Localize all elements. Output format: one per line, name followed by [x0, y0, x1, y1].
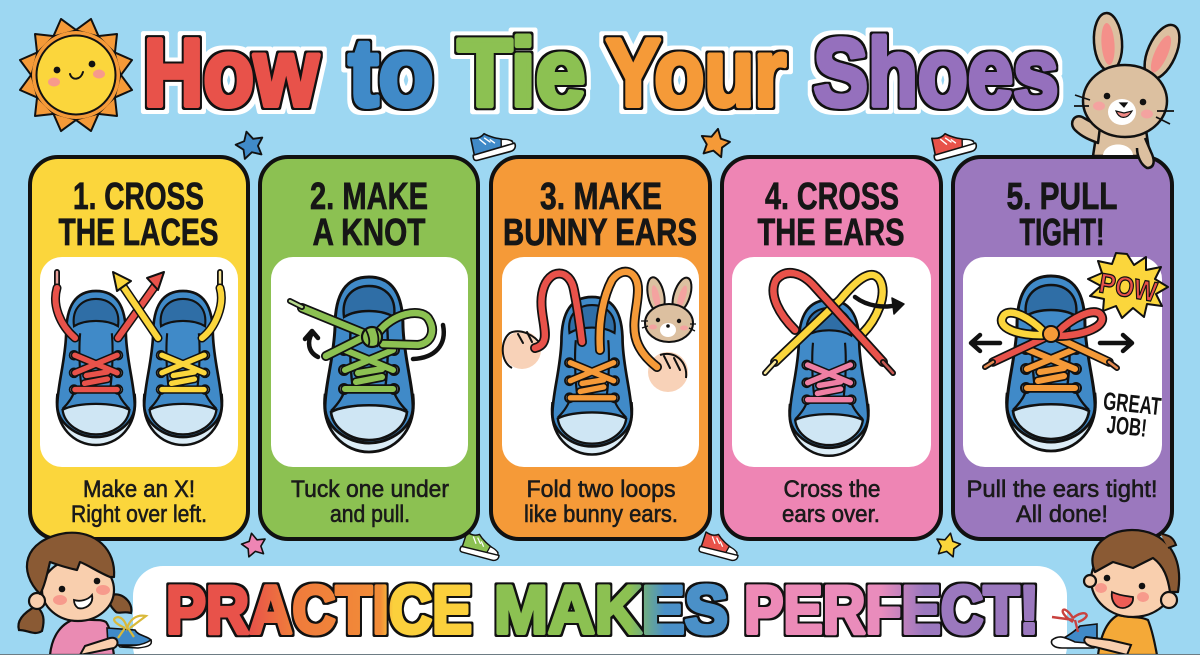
callout: great job: GREAT [1102, 387, 1162, 421]
title [144, 20, 1058, 126]
caption: Make an X! [83, 476, 195, 503]
slogan: PRACTICE [166, 572, 472, 648]
callout: pow burst: POW [1097, 267, 1160, 308]
panel: step 3 make bunny ears [491, 157, 710, 539]
heading: 5. PULL [1006, 176, 1118, 218]
caption: Pull the ears tight! [966, 476, 1158, 503]
icon: boy holding shoe [1051, 530, 1179, 655]
card background [30, 157, 248, 539]
slogan: PERFECT! [744, 572, 1039, 648]
card background [722, 157, 941, 539]
icon: green mini shoe [459, 531, 503, 562]
banner [133, 566, 1067, 655]
heading: 3. MAKE [540, 176, 662, 218]
illustration panel [40, 257, 238, 467]
heading: 2. MAKE [310, 176, 428, 218]
slogan: MAKES [494, 572, 728, 648]
caption: and pull. [330, 501, 410, 528]
illustration panel [963, 257, 1162, 467]
illustration panel [502, 257, 699, 467]
icon: blue star [233, 128, 266, 160]
panel: step 5 pull tight [953, 157, 1172, 539]
icon: red mini shoe [929, 127, 978, 161]
caption: Right over left. [71, 501, 207, 528]
icon: blue mini shoe [468, 127, 517, 161]
card background [491, 157, 710, 539]
illustration: bunny ear loops [503, 272, 696, 454]
heading: THE LACES [58, 212, 218, 254]
heading: A KNOT [312, 212, 426, 254]
caption: Cross the [784, 476, 880, 503]
illustration: tied bow [971, 276, 1132, 451]
icon: pink star [240, 531, 268, 558]
illustration: crossed ears [765, 273, 904, 456]
panel: step 4 cross the ears [722, 157, 941, 539]
title: to [348, 20, 434, 126]
illustration panel [271, 257, 468, 467]
slogan [166, 572, 1039, 648]
caption: All done! [1016, 501, 1108, 528]
icon: waving bunny [1072, 12, 1187, 168]
illustration: two shoes [56, 272, 222, 445]
illustration panel [732, 257, 931, 467]
callout: great job: JOB! [1105, 411, 1148, 443]
caption: like bunny ears. [524, 501, 678, 528]
heading: 1. CROSS [73, 176, 204, 218]
heading: TIGHT! [1020, 212, 1104, 254]
title: Tie [458, 20, 586, 126]
callout: pow burst [1088, 253, 1168, 318]
caption: Tuck one under [291, 476, 449, 503]
panel: step 1 cross the laces [30, 157, 248, 539]
card background [953, 157, 1172, 539]
bottom edge line [0, 654, 1200, 655]
caption: ears over. [782, 501, 880, 528]
caption: Fold two loops [526, 476, 676, 503]
card background [260, 157, 478, 539]
illustration: knot on shoe [290, 277, 444, 452]
title: How [144, 20, 319, 126]
icon: yellow star [934, 531, 962, 558]
icon: girl holding shoe [18, 533, 151, 655]
title: Your [606, 20, 786, 126]
heading: THE EARS [758, 212, 904, 254]
heading: BUNNY EARS [503, 212, 697, 254]
heading: 4. CROSS [765, 176, 899, 218]
panel: step 2 make a knot [260, 157, 478, 539]
icon: orange star [698, 126, 732, 158]
icon: smiling sun [17, 16, 135, 134]
title: Shoes [814, 20, 1058, 126]
icon: red mini shoe [698, 531, 742, 562]
